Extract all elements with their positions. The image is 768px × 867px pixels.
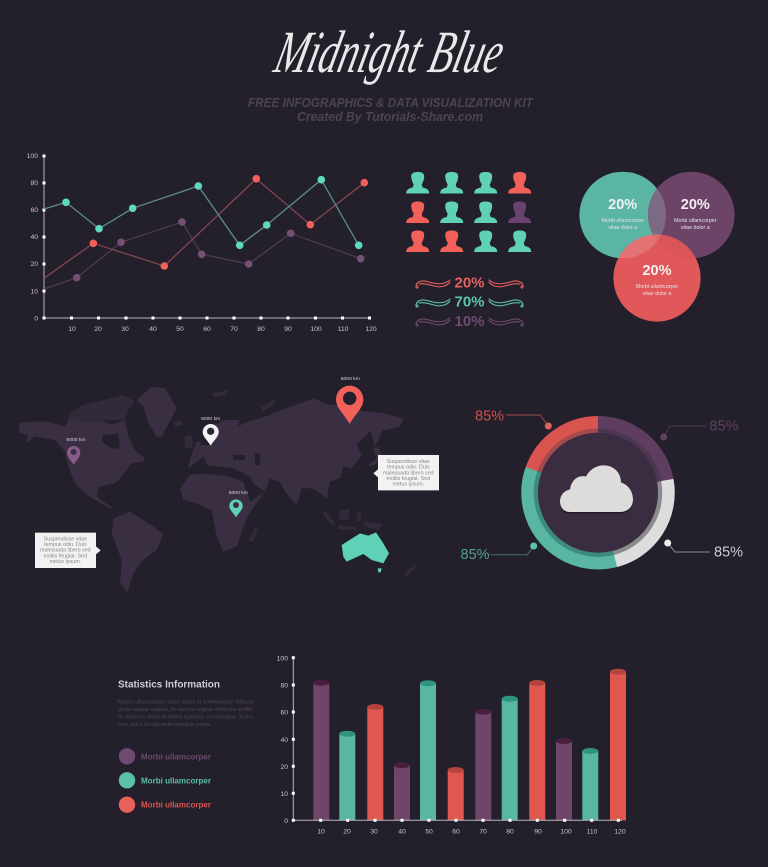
axis labels: 30 — [370, 828, 378, 836]
axis labels: 70 — [230, 326, 238, 333]
row: 20%: 20% — [454, 274, 485, 292]
callout: right: tempus odio. Duis — [387, 465, 430, 471]
inner disc — [537, 432, 659, 554]
statistics paragraph: In rhoncus enim et libero egestas scelerisque. Nunc — [118, 714, 253, 720]
pin: purple: 6000 km — [66, 437, 86, 443]
axis labels: 10 — [30, 288, 38, 296]
callout: purple 85%: 85% — [710, 418, 739, 434]
percent ornaments — [416, 274, 523, 330]
callout: right: malesuada libero sed — [383, 470, 434, 476]
callout: left: Suspendisse vitae — [44, 536, 87, 542]
callout: left: tempus odio. Duis — [44, 542, 87, 548]
subtitle: Created By Tutorials-Share.com — [297, 110, 483, 124]
legend — [119, 748, 212, 813]
axis labels: 90 — [284, 326, 292, 333]
callout: right — [373, 455, 439, 490]
venn labels: 20% — [642, 263, 672, 279]
pin: teal — [229, 490, 248, 517]
axis labels: 60 — [452, 828, 460, 836]
venn labels: Morbi ullamcorper — [602, 218, 644, 224]
axis labels: 80 — [30, 180, 38, 187]
legend: red: Morbi ullamcorper — [141, 800, 212, 810]
axis labels: 120 — [365, 326, 377, 333]
dim arctic and small islands — [68, 390, 416, 577]
callout: left: metus ipsum. — [49, 559, 81, 565]
axis labels: 100 — [27, 153, 38, 160]
axes — [292, 656, 622, 822]
axis labels: 40 — [280, 737, 288, 744]
axis labels: 30 — [121, 326, 129, 333]
axis labels: 120 — [614, 828, 626, 836]
venn labels: Morbi ullamcorper — [636, 284, 678, 290]
axis labels: 20 — [30, 261, 38, 268]
axis labels: 80 — [257, 326, 265, 333]
callout: left: mollis feugiat. Sed — [44, 553, 87, 559]
venn labels: vitae dolor a — [608, 225, 637, 231]
venn labels: Morbi ullamcorper — [674, 218, 717, 224]
legend: teal: Morbi ullamcorper — [141, 775, 212, 785]
donut chart — [460, 402, 743, 583]
axis labels: 80 — [280, 682, 288, 690]
statistics paragraph — [118, 700, 254, 728]
axis labels: 0 — [34, 316, 38, 322]
axis labels: 80 — [506, 828, 514, 836]
axis labels: 20 — [280, 764, 288, 771]
bars — [313, 669, 626, 820]
Australia highlight — [342, 532, 389, 572]
people icons — [406, 172, 531, 252]
venn labels: 20% — [608, 197, 637, 213]
axis labels: 20 — [94, 326, 102, 333]
callout: right: mollis feugiat. Sed — [387, 476, 430, 482]
axis labels: 40 — [398, 828, 406, 836]
venn labels: vitae dolor a — [681, 225, 710, 231]
outer segments — [508, 402, 688, 583]
axis labels: 40 — [30, 234, 38, 241]
callout: left — [35, 533, 101, 568]
statistics paragraph: porta neque sapien, in viverra augue vehicula mollis. — [118, 707, 254, 713]
axis labels: 60 — [30, 207, 38, 214]
world map — [18, 376, 439, 593]
series: teal — [44, 176, 363, 249]
axis labels — [27, 153, 377, 333]
subtitle: FREE INFOGRAPHICS & DATA VISUALIZATION KIT — [248, 96, 534, 110]
row: 10%: 10% — [454, 313, 485, 330]
axis labels: 10 — [317, 828, 325, 836]
pin: red — [336, 376, 363, 424]
pin: purple — [66, 437, 86, 465]
axis labels: 110 — [587, 828, 598, 836]
subtitle — [248, 96, 534, 124]
series: purple — [44, 218, 365, 289]
lakes and bays — [98, 433, 260, 498]
axis labels: 60 — [280, 710, 288, 716]
inner shade ring — [518, 413, 678, 573]
axis labels: 110 — [338, 326, 349, 333]
statistics paragraph: non dolor id nisl pellentesque porta. — [118, 722, 211, 728]
bar chart — [277, 655, 626, 836]
axis labels: 100 — [277, 655, 288, 662]
venn labels: vitae dolor a — [643, 291, 671, 297]
pin: white: 6000 km — [201, 416, 220, 422]
axis labels: 50 — [425, 828, 433, 836]
legend: purple: Morbi ullamcorper — [141, 751, 212, 761]
row: 70%: 70% — [454, 294, 485, 310]
pin: red: 6000 km — [341, 376, 360, 382]
title: Midnight Blue — [268, 20, 511, 86]
axis labels: 70 — [479, 828, 487, 836]
axis labels: 60 — [203, 326, 211, 333]
series: red — [44, 175, 368, 278]
callout: red 85%: 85% — [475, 408, 504, 424]
venn labels: 20% — [681, 197, 710, 213]
land masses — [18, 387, 403, 593]
callout: white 85%: 85% — [714, 544, 743, 560]
venn diagram — [579, 172, 735, 322]
callout: white 85% — [664, 540, 743, 560]
axis labels: 50 — [176, 326, 184, 333]
statistics paragraph: Morbi ullamcorper vitae dolor at scelerisque. Mauris — [118, 700, 254, 706]
icon: cloud — [560, 465, 633, 514]
callout: left: malesuada libero sed — [40, 548, 91, 554]
axis labels — [277, 655, 626, 836]
axes — [42, 154, 371, 320]
axis labels: 40 — [149, 326, 157, 333]
axis labels: 90 — [534, 828, 542, 836]
callout: red 85% — [475, 408, 552, 430]
pin: teal: 6000 km — [229, 490, 248, 496]
axis labels: 0 — [284, 818, 288, 825]
callout: purple 85% — [660, 418, 739, 440]
callout: teal 85%: 85% — [460, 547, 490, 563]
pin: white — [201, 416, 220, 446]
line chart — [27, 153, 377, 333]
axis labels: 10 — [68, 326, 76, 333]
venn labels — [602, 197, 717, 297]
axis labels: 100 — [310, 326, 322, 333]
axis labels: 20 — [343, 828, 351, 836]
callout: teal 85% — [460, 542, 537, 563]
callout: right: Suspendisse vitae — [387, 459, 430, 465]
axis labels: 100 — [560, 828, 572, 836]
axis labels: 10 — [280, 791, 288, 798]
statistics heading: Statistics Information — [118, 678, 220, 690]
callout: right: metus ipsum. — [392, 482, 424, 488]
